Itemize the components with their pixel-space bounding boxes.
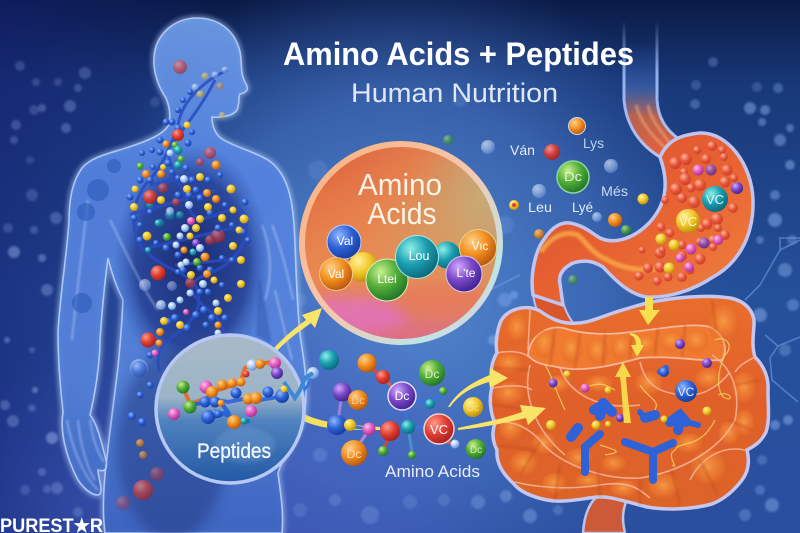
dim background spheres bbox=[146, 60, 225, 288]
free amino acid molecule cluster bbox=[290, 350, 486, 466]
body glow bbox=[58, 18, 306, 533]
labels bbox=[510, 136, 628, 215]
yellow arrow: into lower colon bbox=[458, 405, 546, 430]
labelled spheres: Dc bbox=[470, 445, 482, 456]
bubbles bbox=[443, 118, 648, 285]
labelled spheres: Dc bbox=[347, 447, 361, 461]
rectum tube bbox=[583, 495, 628, 533]
subtitle: Human Nutrition bbox=[351, 78, 558, 108]
coloured stomach bubbles bbox=[656, 164, 743, 274]
body silhouette bbox=[58, 18, 306, 533]
amino acid chain: Vıc bbox=[472, 241, 489, 253]
floating amino acid bubbles and labels bbox=[443, 118, 648, 285]
amino circle title: Acids bbox=[368, 196, 436, 231]
VC teal sphere: VC bbox=[706, 192, 724, 207]
arm muscle highlights bbox=[67, 200, 293, 490]
bokeh particles: right and centre bbox=[293, 57, 799, 524]
amino acid chain: Lou bbox=[409, 249, 429, 263]
labelled spheres: VC bbox=[430, 422, 448, 437]
labels: Leu bbox=[528, 200, 552, 215]
lower torso interior shading bbox=[117, 350, 227, 533]
intestine nutrient dots bbox=[546, 339, 712, 430]
title: Amino Acids + Peptides bbox=[283, 36, 634, 72]
molecular network lines bbox=[480, 238, 800, 402]
human body bbox=[58, 18, 306, 533]
amino acid chain: Val bbox=[337, 234, 353, 248]
labelled spheres: Dc bbox=[395, 389, 409, 403]
yellow arrow: upward bbox=[615, 362, 631, 423]
panel: amino acids circle bbox=[290, 144, 500, 342]
molecule bonds bbox=[290, 360, 455, 452]
amino circle title: Amino bbox=[358, 167, 442, 202]
labels: Ván bbox=[510, 143, 535, 158]
transverse colon band bbox=[528, 325, 725, 369]
right armpit gap bbox=[256, 275, 271, 343]
DNA helix of coloured beads bbox=[116, 60, 251, 510]
chest interior shading bbox=[114, 144, 270, 380]
stomach yellow highlight bbox=[541, 234, 660, 270]
labelled spheres: Dc bbox=[351, 395, 365, 407]
label: Amino Acids: Amino Acids bbox=[385, 462, 480, 481]
amino acid chain: L'te bbox=[457, 266, 476, 280]
labelled spheres: Dc bbox=[425, 367, 439, 381]
amino acid spheres bbox=[327, 354, 460, 459]
amino acid chain bbox=[320, 225, 496, 301]
yellow arrow: curved down bbox=[630, 333, 644, 357]
circle rim bbox=[302, 144, 500, 342]
teal tail beads bbox=[307, 367, 319, 379]
yellow arrow: curved into colon bbox=[448, 368, 508, 407]
VC yellow sphere: VC bbox=[679, 214, 697, 229]
amino circle title bbox=[358, 167, 442, 231]
esophagus bbox=[624, 20, 680, 157]
panel: peptides circle bbox=[156, 335, 313, 483]
amino acid chain: Val bbox=[328, 267, 344, 281]
amino acid chain: Ltei bbox=[377, 272, 397, 286]
coloured strand beads bbox=[116, 66, 248, 510]
VC blue circle: VC bbox=[678, 385, 695, 399]
labels: Lyé bbox=[572, 200, 593, 215]
labels: Lys bbox=[583, 136, 604, 151]
labelled spheres bbox=[341, 360, 486, 466]
VC blue circle bbox=[675, 380, 697, 402]
intestines bbox=[490, 296, 768, 509]
peptides label: Peptides bbox=[197, 440, 271, 463]
faint organ spheres bbox=[72, 159, 121, 313]
colon folds and highlights bbox=[493, 300, 760, 505]
pink glow bbox=[320, 284, 480, 336]
stomach bubbles bbox=[634, 141, 738, 286]
vessels bbox=[545, 339, 730, 466]
yellow arrow peptides to amino acid molecules bbox=[304, 414, 380, 430]
labels: Dc bbox=[564, 169, 583, 184]
VC yellow sphere bbox=[676, 209, 700, 233]
peptide chain bbox=[168, 357, 313, 429]
stomach bbox=[532, 133, 753, 305]
bokeh particles: left bbox=[0, 61, 160, 517]
green Dc bubble bbox=[557, 161, 589, 193]
yellow arrow to amino acids circle bbox=[273, 308, 322, 352]
VC teal sphere bbox=[702, 186, 728, 212]
labelled spheres: Dc bbox=[467, 403, 479, 414]
yellow arrow: stomach to intestine bbox=[639, 297, 660, 325]
labels: Més bbox=[601, 184, 628, 199]
blue strand beads bbox=[126, 89, 251, 426]
small intestine tube connecting down bbox=[533, 285, 575, 330]
blue receptors bbox=[571, 368, 698, 480]
